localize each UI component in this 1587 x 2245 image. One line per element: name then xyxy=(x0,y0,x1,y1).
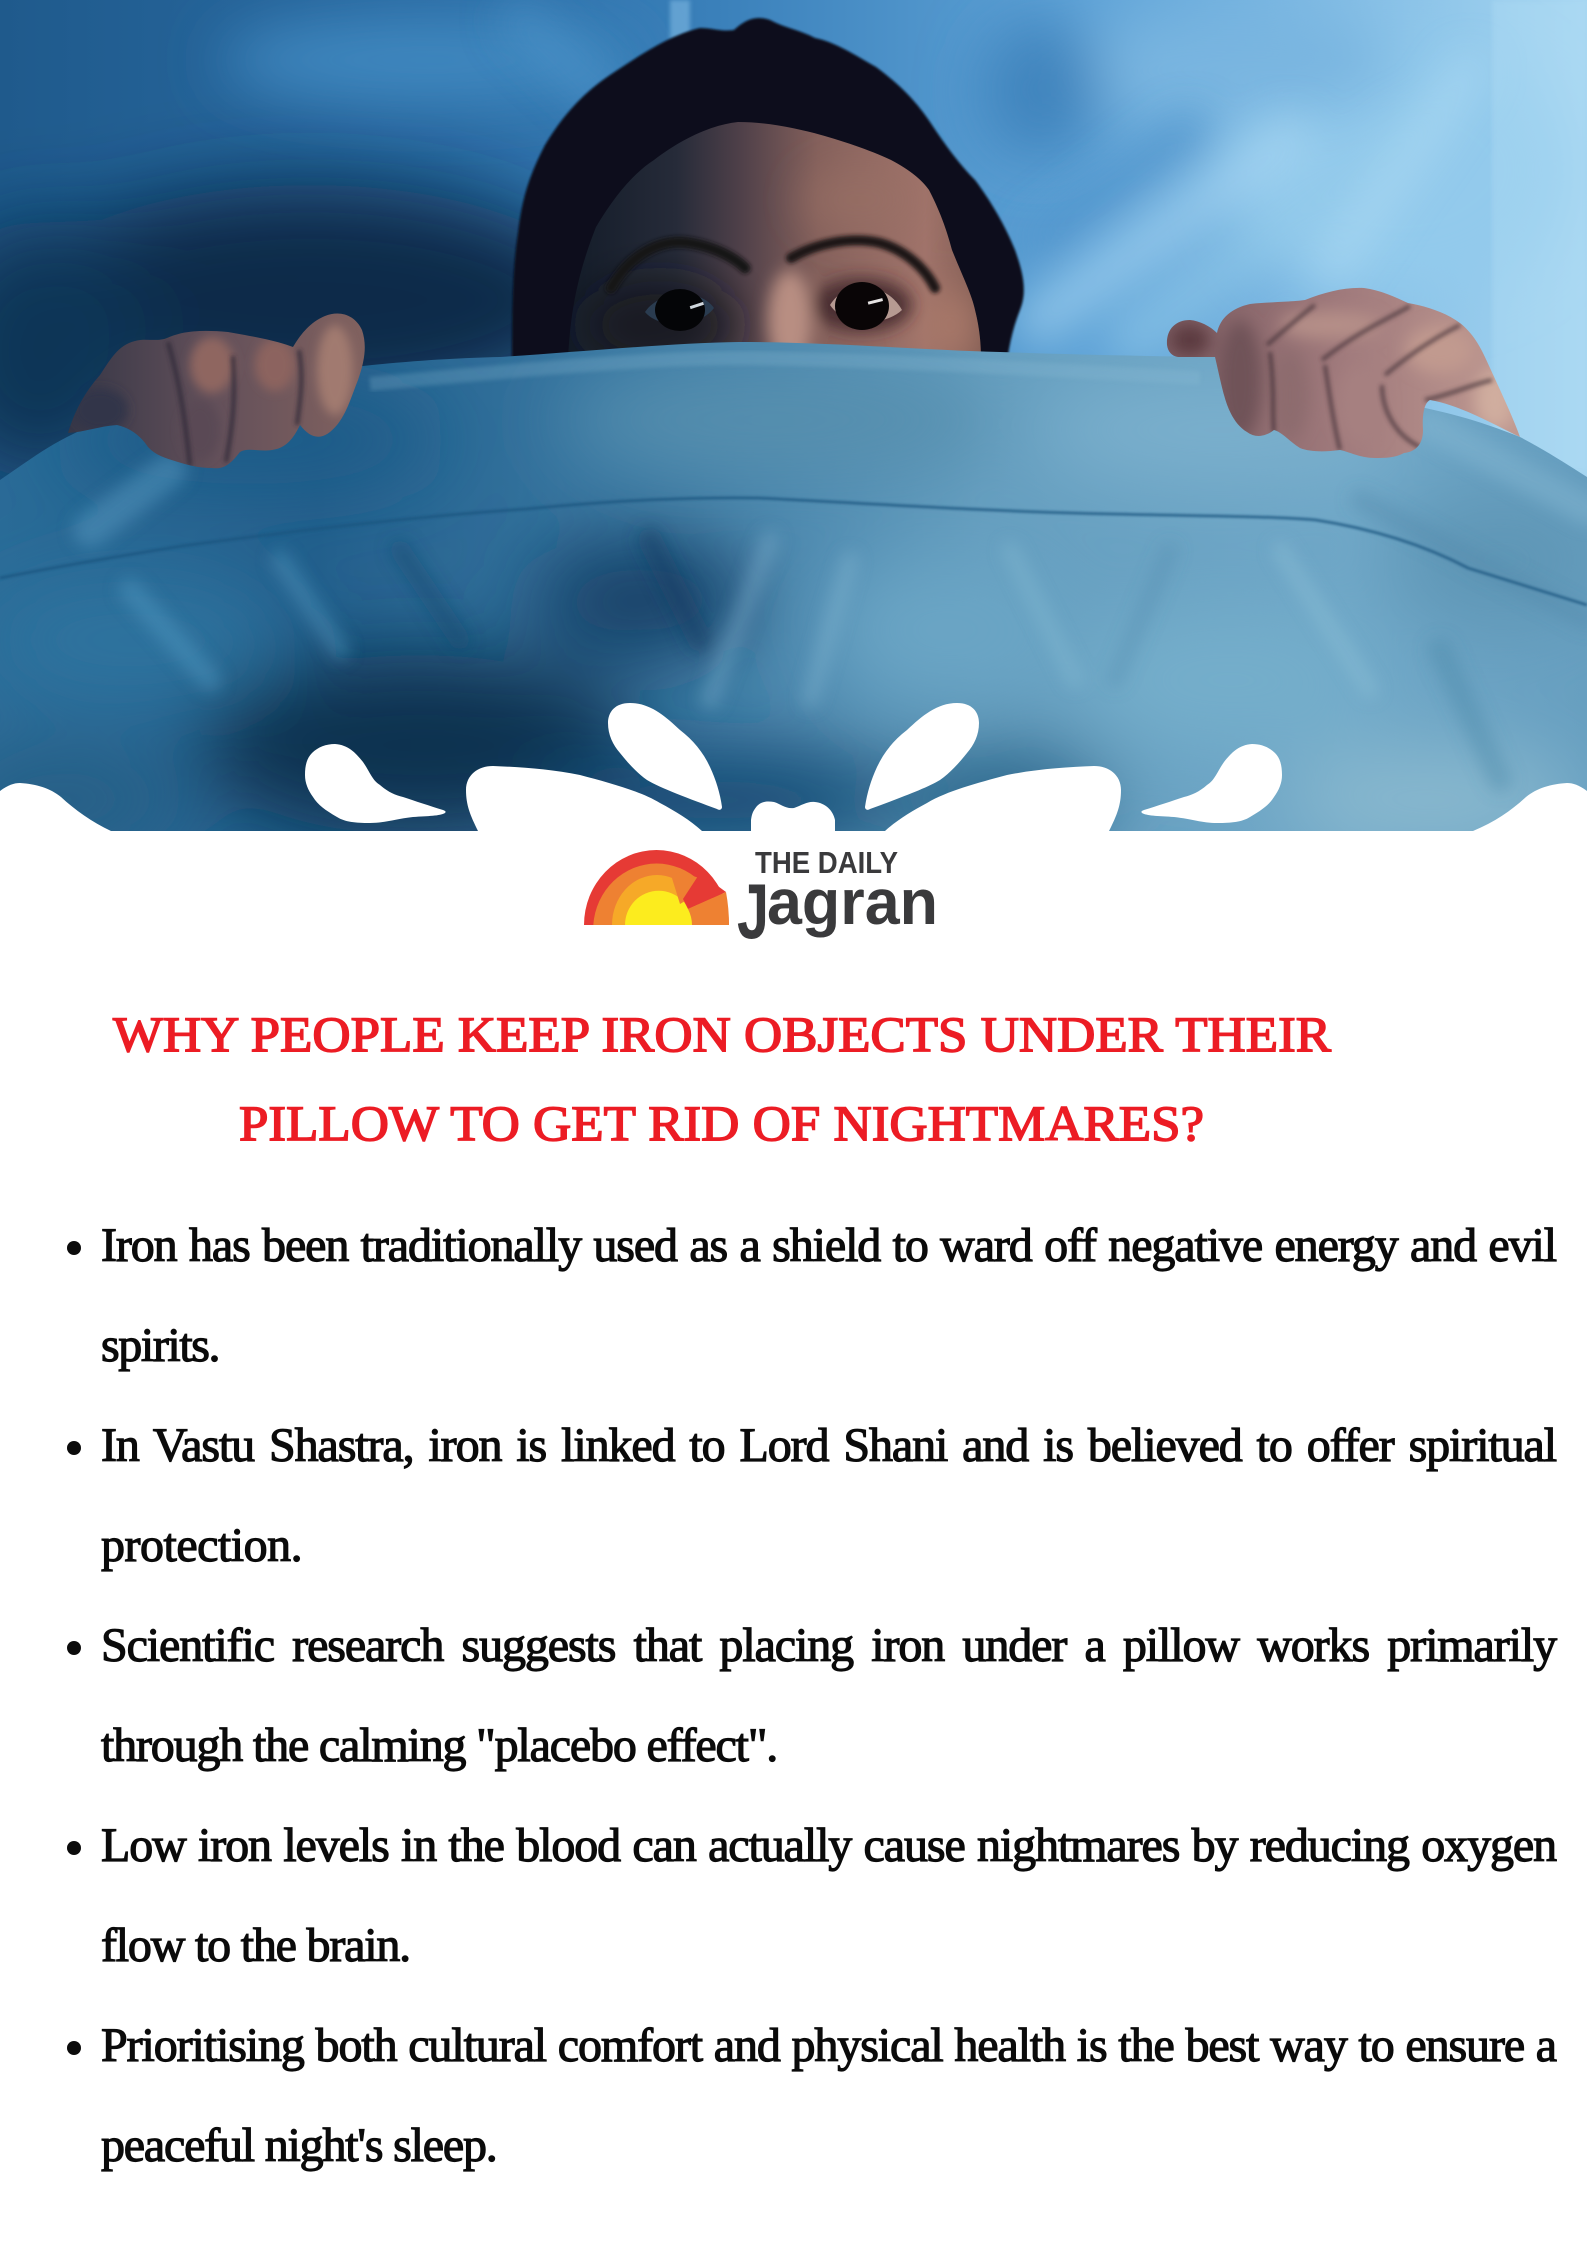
left hand xyxy=(68,314,365,468)
logo sun icon xyxy=(584,850,729,925)
hair xyxy=(512,18,1024,372)
bullet 3 xyxy=(67,1619,1558,1772)
bullet 5 xyxy=(67,2019,1557,2172)
bullet 4: Low iron levels in the blood can actually cause nightmares by reducing oxygen xyxy=(101,1819,1556,1872)
eyes and brows xyxy=(611,240,935,331)
bullet 1: Iron has been traditionally used as a shield to ward off negative energy and evil xyxy=(101,1219,1556,1272)
bullet 4: flow to the brain. xyxy=(101,1919,410,1972)
title: WHY PEOPLE KEEP IRON OBJECTS UNDER THEIR xyxy=(113,1006,1332,1062)
logo wordmark: THE DAILY xyxy=(755,845,898,880)
bullet 3: Scientific research suggests that placing iron under a pillow works primarily xyxy=(101,1619,1556,1672)
bullet 4 xyxy=(67,1819,1557,1972)
bullet 2 xyxy=(67,1419,1557,1572)
blanket xyxy=(0,340,1587,850)
bullet 5: Prioritising both cultural comfort and physical health is the best way to ensure a xyxy=(101,2019,1556,2072)
right hand xyxy=(1160,285,1525,465)
pillow background xyxy=(0,0,1587,840)
title: PILLOW TO GET RID OF NIGHTMARES? xyxy=(239,1095,1204,1151)
title xyxy=(112,1006,1332,1151)
bullet 2: In Vastu Shastra, iron is linked to Lord Shani and is believed to offer spiritual xyxy=(101,1419,1556,1472)
face xyxy=(568,122,981,352)
bullet 1: spirits. xyxy=(101,1319,219,1372)
logo wordmark: agran xyxy=(767,866,938,938)
photo: frightened person peeking over blanket xyxy=(0,0,1587,831)
bullet 3: through the calming "placebo effect". xyxy=(101,1719,777,1772)
logo: The Daily Jagran xyxy=(584,845,938,945)
white splash shapes xyxy=(0,703,1587,841)
bullet 1 xyxy=(67,1219,1557,1372)
bullet 2: protection. xyxy=(101,1519,302,1572)
bullet 5: peaceful night's sleep. xyxy=(101,2119,497,2172)
logo wordmark xyxy=(737,845,938,955)
